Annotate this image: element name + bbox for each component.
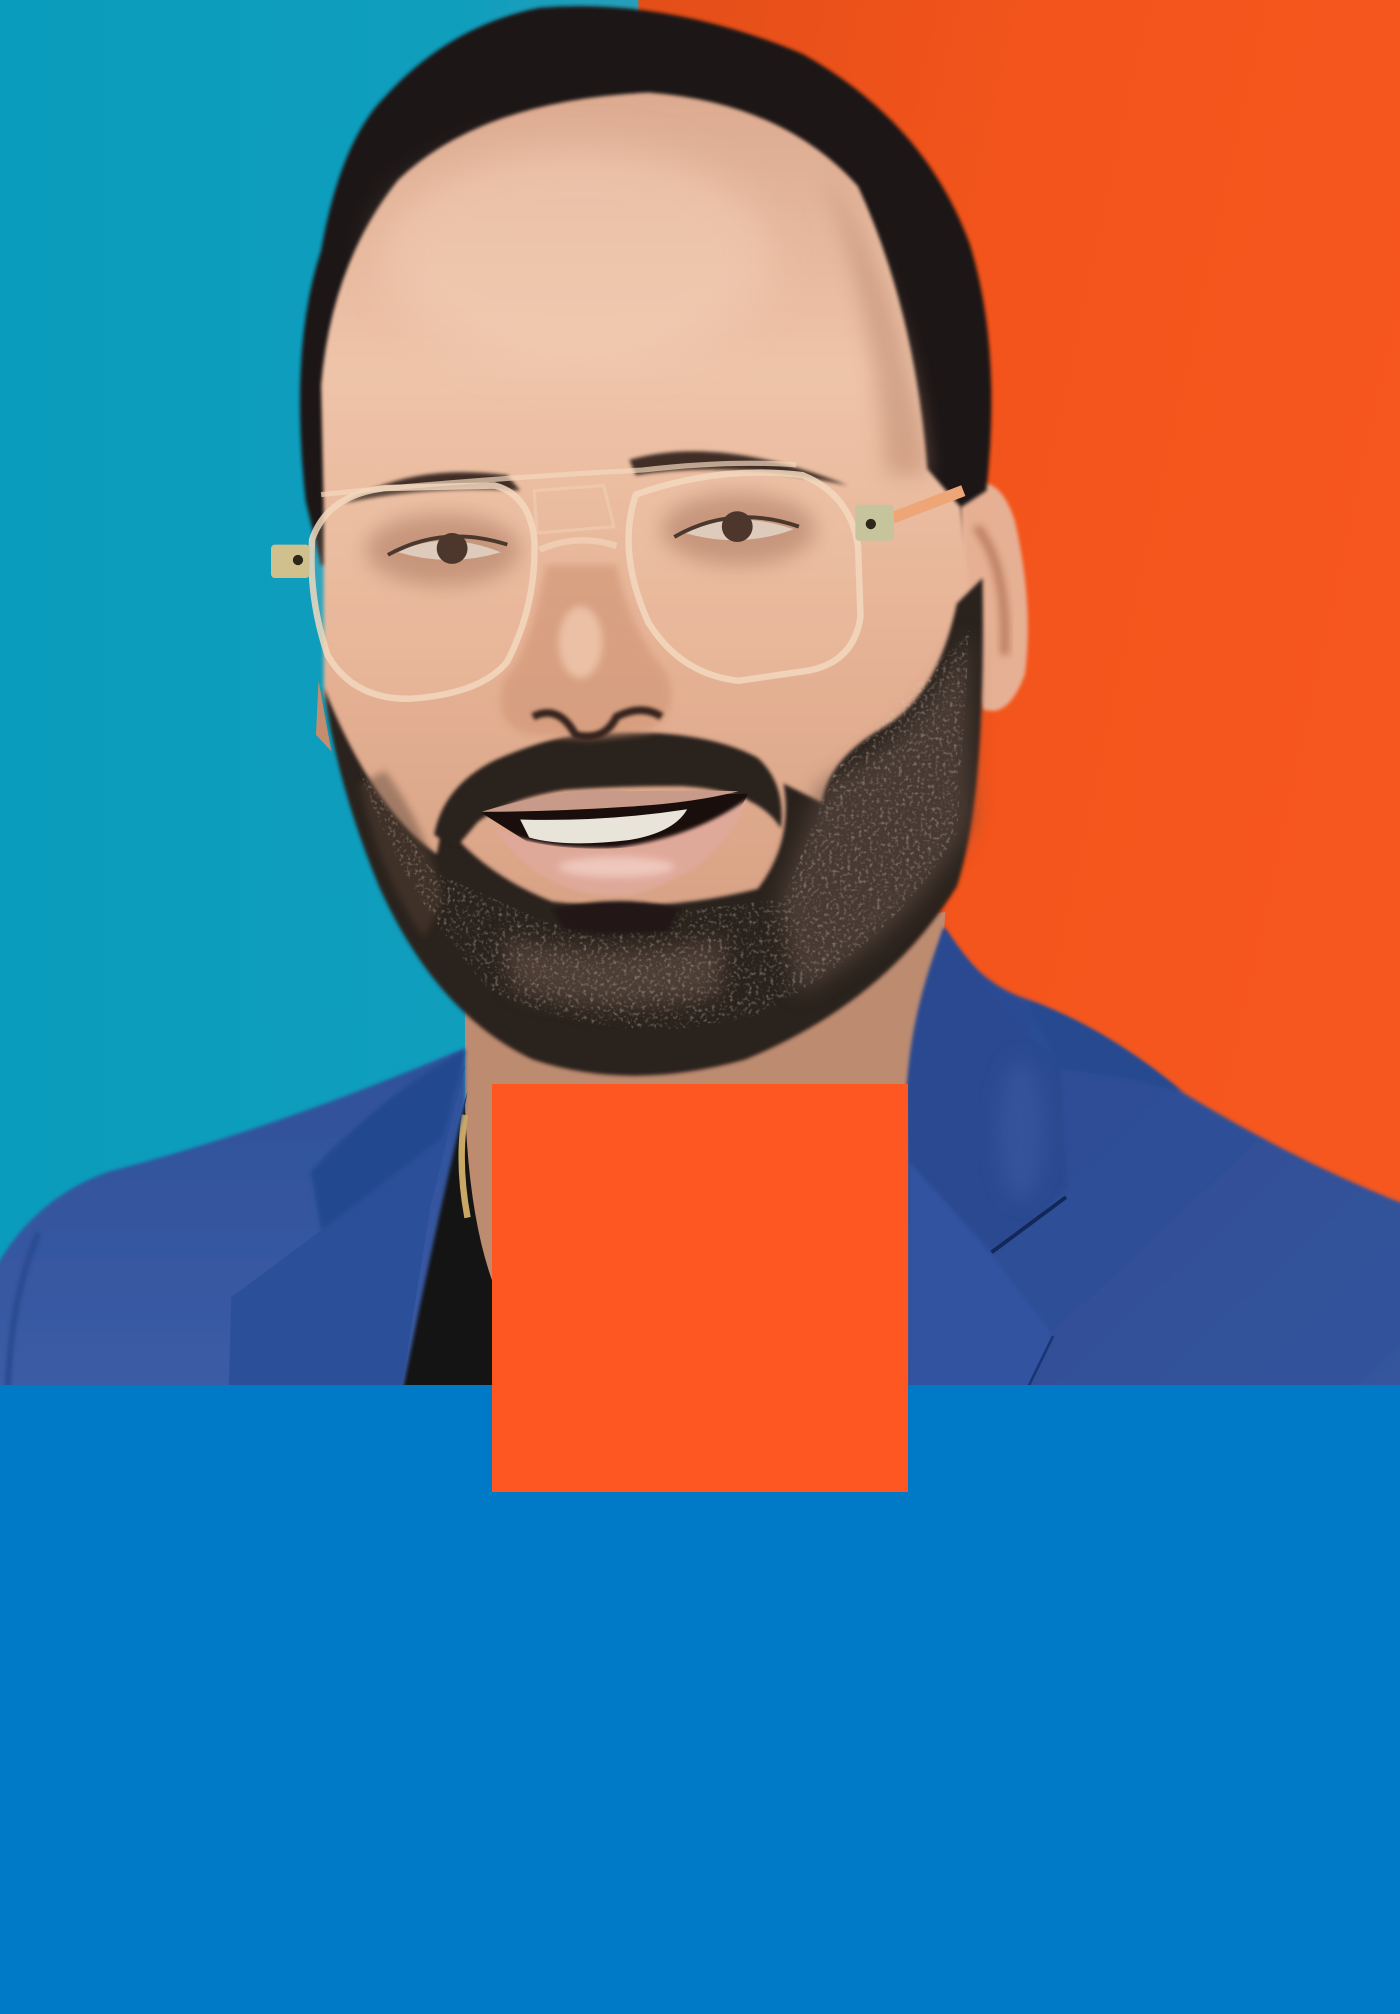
blue lower panel [0, 1385, 1400, 2014]
forehead highlight [385, 148, 771, 366]
glasses hinges [271, 505, 894, 578]
background: orange side [638, 0, 1400, 1400]
hair [300, 6, 991, 565]
portrait photo illustration [0, 0, 1400, 1385]
temple shading [822, 167, 927, 475]
glasses [311, 463, 963, 699]
eye sockets [366, 493, 816, 586]
face [321, 92, 979, 1015]
neck and shirt [385, 912, 945, 1400]
ear [316, 483, 1028, 751]
eyebrows [344, 451, 848, 504]
mouth [482, 790, 748, 896]
nose [500, 565, 672, 739]
background: teal side [0, 0, 668, 1400]
orange square [492, 1084, 908, 1492]
jacket [0, 927, 1400, 1400]
eyes [388, 511, 799, 564]
beard [324, 578, 983, 1076]
moustache [434, 732, 782, 848]
